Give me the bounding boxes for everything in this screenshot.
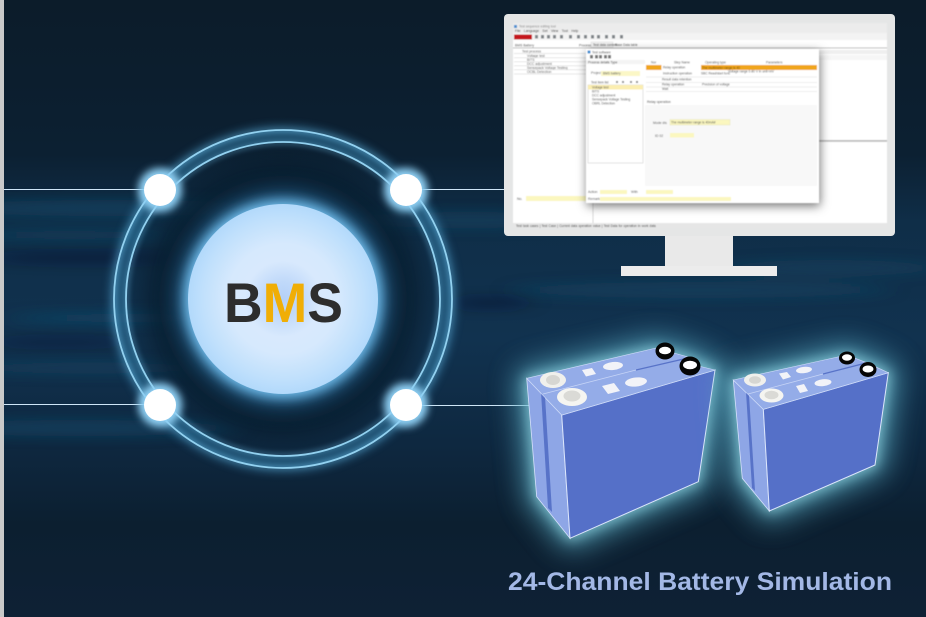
dialog footer fields: Remarks xyxy=(588,197,602,201)
dialog project field: Project xyxy=(591,71,602,75)
dialog step table xyxy=(651,60,783,91)
side face xyxy=(733,380,769,511)
main step list: OCBL Detection xyxy=(527,70,551,74)
relay operation panel: Relay operation xyxy=(647,100,671,104)
nodes xyxy=(138,168,428,427)
dialog step table: Instruction operation xyxy=(663,72,692,76)
front face xyxy=(763,373,888,511)
software screen xyxy=(513,23,887,228)
left edge strip xyxy=(0,0,4,617)
dialog step table: SBC Read/start func xyxy=(701,72,730,76)
dialog step table: Voltage range 0-80 V in unit=mV xyxy=(728,70,775,74)
dialog step table: Step Name xyxy=(674,60,690,64)
caption: 24-Channel Battery Simulation xyxy=(508,568,892,596)
dialog step table: Wait xyxy=(662,87,668,91)
monitor stand xyxy=(621,236,777,276)
side face xyxy=(527,378,570,538)
dialog test list: Test item list xyxy=(591,80,609,84)
side divider xyxy=(746,392,755,491)
dialog step table: Parameters xyxy=(766,60,783,64)
cell seam xyxy=(543,358,688,394)
main step list: BITS xyxy=(527,58,535,62)
red toolbar button xyxy=(514,34,532,40)
dialog window: Voltage test xyxy=(592,86,609,90)
dialog window: OBRL Detection xyxy=(592,102,615,106)
front face xyxy=(562,370,715,538)
main step list: Sensepack Voltage Testing xyxy=(527,66,568,70)
bottom yellow input: No. xyxy=(517,197,522,201)
dialog window: Process details Type xyxy=(588,60,618,64)
terminals and vents xyxy=(744,352,876,402)
monitor xyxy=(504,14,895,276)
connector lines xyxy=(4,190,532,406)
relay operation panel: ID 02 xyxy=(655,134,663,138)
software screen: Base Data table xyxy=(615,43,638,47)
relay operation panel xyxy=(645,100,817,186)
dialog step table: Nor xyxy=(651,60,657,64)
dialog footer fields xyxy=(588,190,731,201)
relay operation panel: The multimeter range is 40mA# xyxy=(671,120,716,124)
wide glow xyxy=(733,355,888,511)
dialog step table: Result data retention xyxy=(662,78,692,82)
software screen: Test data content xyxy=(593,43,617,47)
left battery pack xyxy=(527,342,715,538)
highlighted orange row: The multimeter range is 40 xyxy=(702,66,740,70)
toolbar icons xyxy=(535,35,623,38)
dialog footer fields: With xyxy=(631,190,638,194)
software screen: Test sequence editing tool xyxy=(519,24,556,28)
terminals and vents xyxy=(540,342,700,406)
main step list: DCC adjustment xyxy=(527,62,552,66)
cell seam xyxy=(748,363,866,394)
dialog window: Test software xyxy=(592,50,611,54)
central core xyxy=(179,195,387,403)
relay operation panel: Mode dis xyxy=(653,121,667,125)
dialog window xyxy=(586,49,819,203)
dialog window: Sensepack Voltage Testing xyxy=(592,98,630,102)
dialog step table: Precision of voltage xyxy=(702,82,730,86)
software screen: Process xyxy=(579,44,592,48)
main step list: Voltage test xyxy=(527,54,545,58)
dialog footer fields: Action xyxy=(588,190,598,194)
software screen: BMS Battery xyxy=(515,44,534,48)
right battery pack xyxy=(733,352,888,511)
rings xyxy=(112,128,454,470)
dialog window: DCC adjustment xyxy=(592,94,615,98)
menu bar: File Language Set View Tool Help xyxy=(515,29,578,33)
label: BMS: BMS xyxy=(224,271,343,334)
tight glow xyxy=(527,348,715,538)
monitor bezel xyxy=(504,14,895,236)
dialog step table: Relay operation xyxy=(662,82,685,86)
wide glow xyxy=(527,348,715,538)
main step list: Test process xyxy=(522,50,541,54)
dialog step table: Operating type xyxy=(705,60,726,64)
top face xyxy=(527,348,715,415)
right panel lines xyxy=(819,50,887,54)
software screen: Test task cases | Test Case | Current data operation value | Test Data for operation in work data xyxy=(516,224,656,228)
dialog window: BMS battery xyxy=(603,72,621,76)
dialog window: BITS xyxy=(592,90,599,94)
bottom tabs xyxy=(513,223,887,228)
top face xyxy=(733,355,888,409)
dialog step table: Relay operation xyxy=(663,66,686,70)
main step list xyxy=(522,50,568,74)
side divider xyxy=(541,392,552,512)
BMS ring diagram xyxy=(112,128,454,470)
highlighted orange row xyxy=(646,65,817,70)
tight glow xyxy=(733,355,888,511)
